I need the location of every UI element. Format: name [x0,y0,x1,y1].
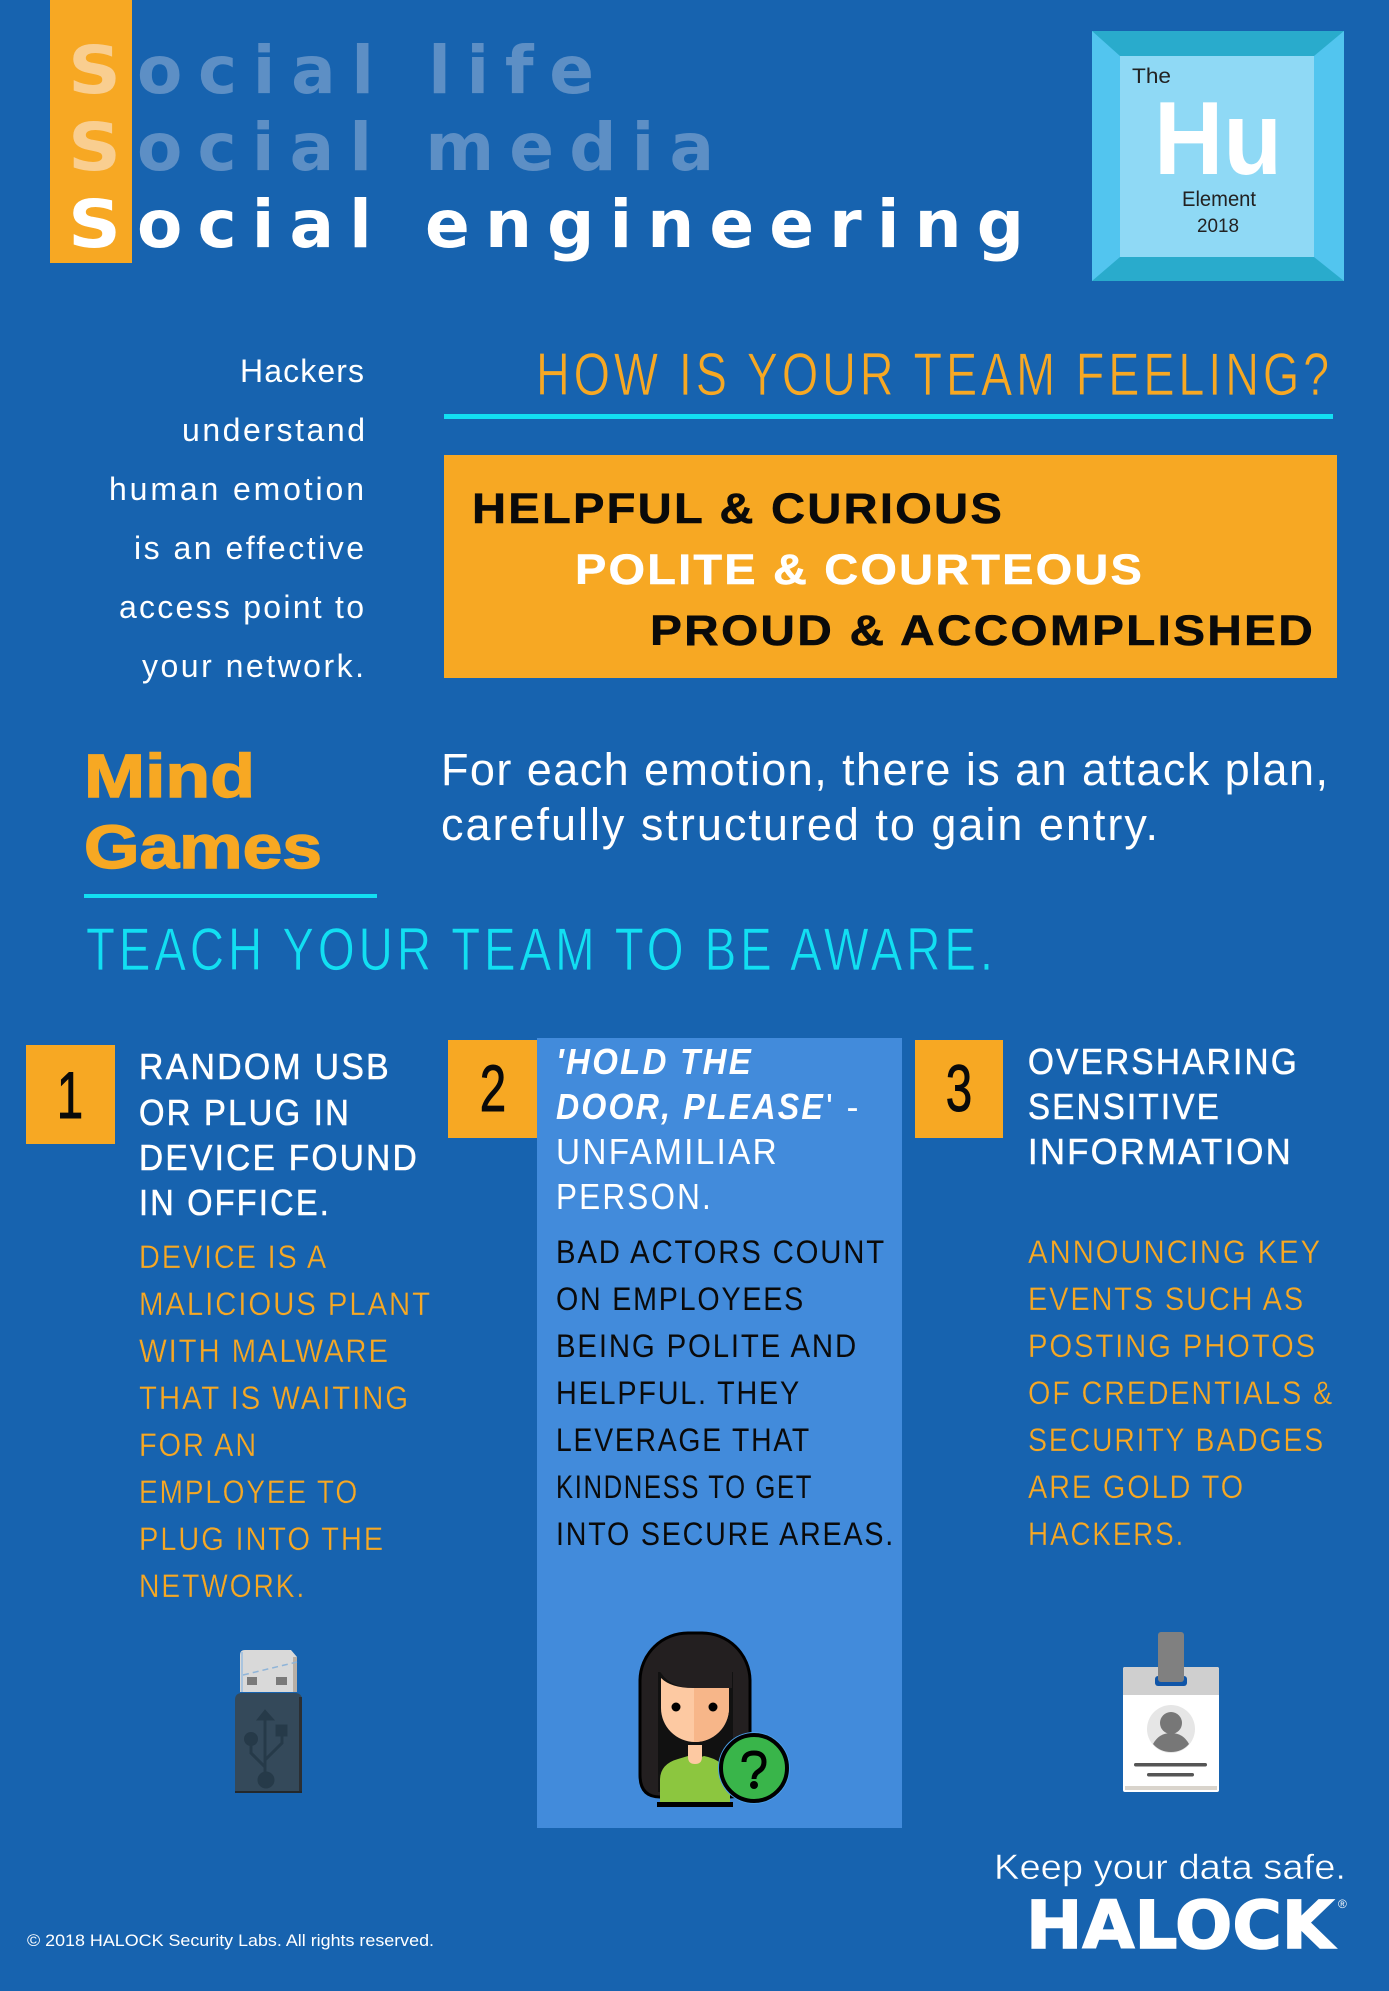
number badge 1: 1 [57,1059,83,1133]
side text: hackers understand human emotion: access point to [119,589,364,625]
icon: USB drive [235,1650,302,1793]
number badge 2 [448,1040,537,1138]
item 2 heading: 'HOLD THE [556,1041,753,1082]
item 3 body: OF CREDENTIALS & [1028,1375,1334,1411]
item 3 heading [1028,1041,1299,1172]
side text: hackers understand human emotion: human emotion [109,471,364,507]
title line: Social engineering: ocial engineering [137,186,1024,263]
title line: Social life: S [68,32,121,109]
item 3 heading: OVERSHARING [1028,1041,1299,1082]
periodic element tile: The Hu Element 2018: Element [1182,188,1256,211]
side text: hackers understand human emotion: is an effective [134,530,364,566]
item 1 body: MALICIOUS PLANT [139,1286,432,1322]
panel: feelings: HELPFUL & CURIOUS [472,485,1004,533]
item 2 heading: PERSON. [556,1176,713,1217]
panel: feelings [444,455,1337,678]
item 2 heading [556,1041,861,1217]
item 1 body: PLUG INTO THE [139,1521,385,1557]
item 3 body: POSTING PHOTOS [1028,1328,1317,1364]
item 2 body: INTO SECURE AREAS. [556,1516,895,1552]
number badge 2: 2 [480,1052,506,1126]
item 2 body: LEVERAGE THAT [556,1422,811,1458]
heading: mind games: Mind [84,742,255,810]
item 3 body: ANNOUNCING KEY [1028,1234,1322,1270]
tagline: keep your data safe: Keep your data safe. [994,1848,1346,1887]
icon: ID badge [1123,1632,1219,1792]
title line: Social life: ocial life [137,32,594,109]
item 1 heading: RANDOM USB [139,1046,391,1087]
icon: person with question mark [640,1633,790,1807]
logo: HALOCK: ® [1338,1897,1347,1911]
item 3 body: SECURITY BADGES [1028,1422,1325,1458]
number badge 3: 3 [946,1052,972,1126]
side text: hackers understand human emotion [109,353,365,684]
periodic element tile: The Hu Element 2018: The [1132,65,1171,88]
number badge 1 [26,1045,115,1144]
heading: mind games: Games [84,813,322,881]
panel: item 1 USB [26,1045,432,1793]
item 3 body: HACKERS. [1028,1516,1185,1552]
item 3 body: EVENTS SUCH AS [1028,1281,1305,1317]
number badge 3 [915,1040,1003,1138]
item 2 body: BEING POLITE AND [556,1328,858,1364]
item 3 heading: SENSITIVE [1028,1086,1221,1127]
periodic element tile: The Hu Element 2018 [1092,31,1344,281]
item 2 body [556,1234,895,1552]
item 1 heading: DEVICE FOUND [139,1137,419,1178]
panel: item 3 oversharing [915,1040,1334,1792]
item 1 body: FOR AN [139,1427,258,1463]
item 1 body: WITH MALWARE [139,1333,390,1369]
item 1 body: NETWORK. [139,1568,306,1604]
item 2 heading: UNFAMILIAR [556,1131,779,1172]
text: attack plan statement: carefully structured to gain entry. [441,799,1158,850]
text: attack plan statement [441,744,1328,850]
item 2 body: KINDNESS TO GET [556,1469,813,1505]
title line: Social engineering: S [68,186,121,263]
item 2 body: HELPFUL. THEY [556,1375,801,1411]
side text: hackers understand human emotion: your network. [142,648,364,684]
heading: mind games [84,742,322,881]
item 3 body [1028,1234,1334,1552]
panel: item 2 hold the door [448,1038,902,1828]
copyright: © 2018 HALOCK Security Labs. All rights reserved. [27,1931,434,1950]
item 2 body: BAD ACTORS COUNT [556,1234,886,1270]
title line: Social media: S [68,109,121,186]
item 3 heading: INFORMATION [1028,1131,1293,1172]
item 3 body: ARE GOLD TO [1028,1469,1245,1505]
item 1 heading: OR PLUG IN [139,1092,351,1133]
item 1 body: EMPLOYEE TO [139,1474,359,1510]
item 1 heading [139,1046,419,1223]
item 2 heading: ' - [826,1086,861,1127]
item 1 heading: IN OFFICE. [139,1182,331,1223]
item 1 body: DEVICE IS A [139,1239,328,1275]
panel: feelings: POLITE & COURTEOUS [575,546,1144,594]
title: social life, media, engineering [50,0,1024,263]
text: attack plan statement: For each emotion, there is an attack plan, [441,744,1328,795]
logo: HALOCK: HALOCK [1026,1887,1337,1964]
item 2 body: ON EMPLOYEES [556,1281,805,1317]
item 2 heading: DOOR, PLEASE [556,1086,825,1127]
side text: hackers understand human emotion: Hackers [240,353,364,389]
periodic element tile: The Hu Element 2018: Hu [1154,81,1282,197]
item 1 body [139,1239,432,1604]
panel: feelings: PROUD & ACCOMPLISHED [650,607,1315,655]
heading: teach your team to be aware: TEACH YOUR TEAM TO BE AWARE. [86,916,997,983]
item 1 body: THAT IS WAITING [139,1380,410,1416]
side text: hackers understand human emotion: understand [182,412,365,448]
title line: Social media: ocial media [137,109,714,186]
periodic element tile: The Hu Element 2018: 2018 [1197,216,1239,237]
orange title bar [50,0,132,263]
